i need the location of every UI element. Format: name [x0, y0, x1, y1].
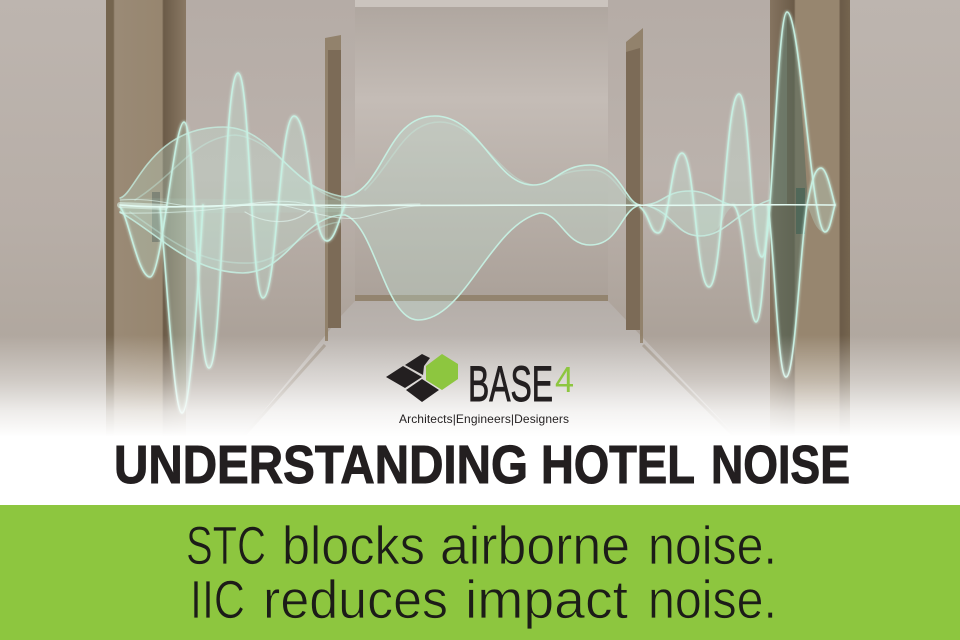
- statement: IIC: impact: [465, 570, 628, 630]
- logo tagline: Architects|Engineers|Designers: [399, 412, 569, 426]
- logo mark: black diamonds and green hexagon: [386, 354, 458, 402]
- central bright line: [120, 199, 835, 222]
- statement: STC: blocks: [282, 516, 425, 576]
- statement: STC: airborne: [440, 516, 630, 576]
- statement: IIC: reduces: [263, 570, 448, 630]
- wave outlines: [120, 12, 835, 413]
- left outer wall: [0, 0, 106, 440]
- right large door: [770, 0, 850, 440]
- statement: STC: STC: [186, 516, 266, 576]
- left far door: [325, 35, 341, 341]
- white title band: [0, 436, 960, 506]
- wave glow: [120, 12, 835, 413]
- wave fills: [120, 12, 835, 413]
- title: NOISE: [711, 435, 850, 495]
- logo wordmark: BASE: [468, 356, 553, 412]
- back wall: [355, 0, 608, 300]
- logo superscript 4: 4: [555, 359, 574, 400]
- right far door: [626, 28, 643, 343]
- statement: IIC: IIC: [190, 570, 245, 630]
- statement: STC: noise.: [648, 516, 777, 576]
- statement: IIC: noise.: [648, 570, 777, 630]
- sound wave illustration: [120, 12, 835, 413]
- title: [114, 435, 850, 495]
- right baseboard: [643, 345, 738, 440]
- statement: IIC: [190, 570, 777, 630]
- right outer wall: [850, 0, 960, 440]
- door hardware right: [796, 188, 805, 234]
- BASE4 logo: [386, 354, 574, 426]
- statement: STC: [186, 516, 777, 576]
- floor: [240, 301, 740, 440]
- white fade at bottom of photo: [0, 335, 960, 437]
- background: hotel corridor photo: [0, 0, 960, 440]
- door hardware left: [152, 192, 160, 242]
- left large door: [106, 0, 186, 440]
- title: HOTEL: [541, 435, 695, 495]
- left baseboard: [240, 345, 325, 440]
- title: UNDERSTANDING: [114, 435, 528, 495]
- green panel: [0, 505, 960, 640]
